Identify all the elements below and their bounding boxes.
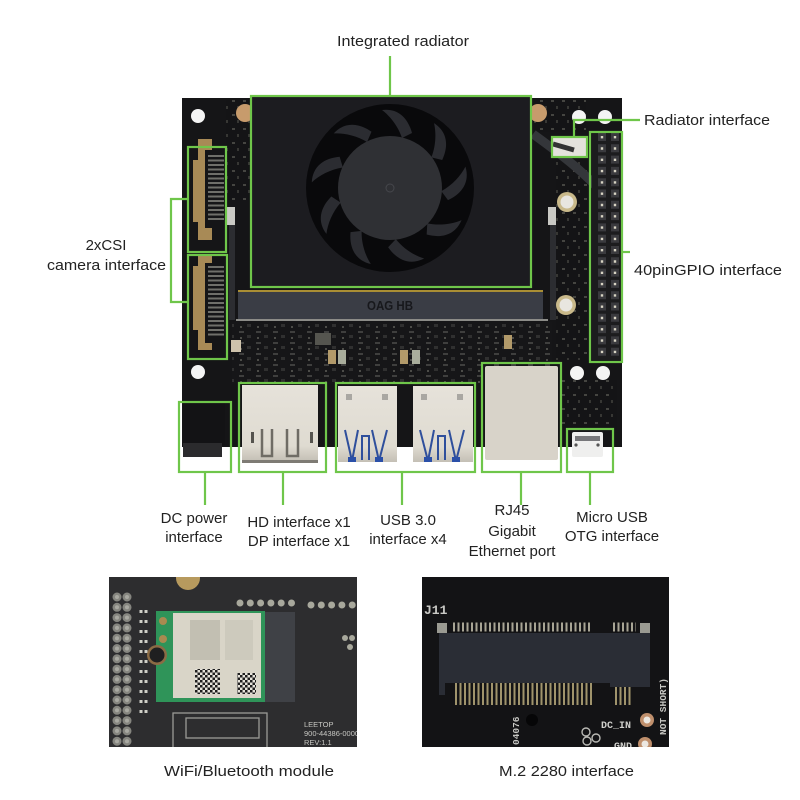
rj45 connector: [485, 366, 558, 460]
label: rj45: Ethernet port: [469, 543, 556, 560]
label: csi camera interface: 2xCSI: [86, 237, 126, 254]
board silkscreen: DC_IN: [601, 721, 631, 732]
socket corner posts: [437, 623, 650, 633]
m.2 socket body: [439, 633, 650, 695]
mounting holes: [191, 109, 612, 380]
label: hd and dp: [247, 514, 351, 550]
smd component texture: [226, 100, 617, 430]
label: micro usb: Micro USB: [576, 509, 648, 526]
label: dc power: [161, 510, 227, 546]
caption: wifi: WiFi/Bluetooth module: [164, 763, 334, 780]
label: radiator interface: Radiator interface: [644, 112, 770, 129]
caption: m.2: M.2 2280 interface: [499, 763, 634, 780]
gpio header: [592, 133, 621, 360]
pcb: [182, 98, 622, 447]
dc power jack: [183, 403, 225, 457]
panel: m.2 photo: [422, 577, 669, 753]
label: rj45: Gigabit: [488, 523, 537, 540]
label: csi camera interface: camera interface: [47, 257, 166, 274]
board silkscreen: [513, 680, 668, 747]
panel: wifi photo: [109, 577, 357, 747]
label: gpio interface: 40pinGPIO interface: [634, 262, 782, 279]
fan: [306, 104, 474, 272]
green callout frames: [179, 96, 622, 472]
label: usb: interface x4: [369, 531, 447, 548]
qr code left: [195, 669, 220, 694]
memory socket: OAG HB: [367, 298, 413, 313]
silkscreen text: 900-44386-0000: [304, 729, 359, 738]
printed label text blocks: [190, 620, 220, 660]
heatsink with fan: [252, 97, 530, 287]
gold screws and standoffs: [236, 104, 577, 315]
board silkscreen: GND: [614, 742, 632, 753]
csi connector top: [193, 139, 216, 240]
leader lines: [171, 56, 640, 505]
pin header: [117, 597, 127, 747]
label: usb: USB 3.0: [380, 512, 436, 529]
memory socket: [227, 207, 556, 321]
fan cable: [533, 134, 612, 205]
silkscreen outlines: [172, 712, 268, 747]
silkscreen text: LEETOP: [304, 720, 333, 729]
label: rj45: RJ45: [494, 502, 530, 519]
label: hd and dp: HD interface x1: [247, 514, 351, 531]
solder pads: [526, 713, 654, 747]
label: usb: [369, 512, 447, 548]
silkscreen text: [304, 722, 357, 745]
silkscreen text: REV:1.1: [304, 738, 332, 747]
label: csi camera interface: [47, 237, 166, 274]
screw: [147, 645, 167, 665]
label: integrated radiator: Integrated radiator: [337, 33, 469, 50]
usb connector right: [413, 386, 473, 462]
j11 marking: J11: [424, 603, 448, 618]
label: rj45: [469, 502, 556, 560]
label: micro usb: OTG interface: [565, 528, 659, 545]
micro usb connector: [572, 432, 603, 457]
qr code right: [237, 673, 256, 694]
m.2 pins: [453, 627, 636, 694]
m.2 socket: [265, 612, 295, 702]
usb connector left: [338, 386, 397, 462]
label: dc power: DC power: [161, 510, 227, 527]
label: hd and dp: DP interface x1: [248, 533, 350, 550]
hdmi dp connector: [242, 385, 318, 463]
main board photo: [182, 97, 622, 463]
board silkscreen: NOT SHORT): [658, 678, 669, 735]
label: dc power: interface: [165, 529, 223, 546]
csi connector bottom: [193, 256, 216, 350]
wifi module card: [156, 611, 265, 702]
board silkscreen: 04076: [511, 716, 522, 745]
gold pads: [141, 566, 355, 715]
label: micro usb: [565, 509, 659, 545]
radiator fan connector: [553, 138, 586, 156]
